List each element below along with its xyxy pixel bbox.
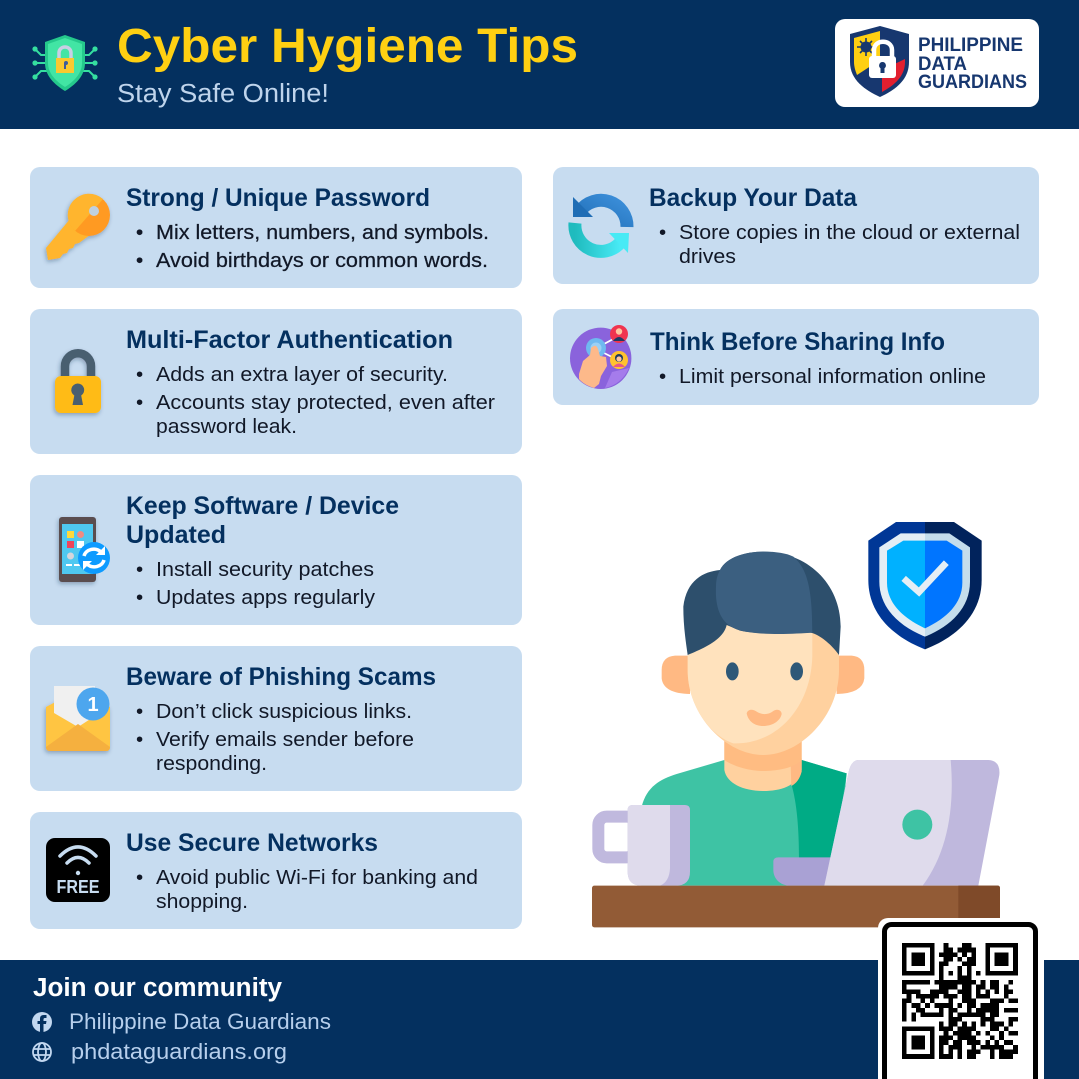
icon: phone with refresh (59, 517, 110, 582)
logo: Philippine Data Guardians: DATA (918, 54, 967, 75)
bullet list: Updates apps regularly (156, 586, 376, 609)
laptop (824, 760, 999, 886)
bullet list (136, 558, 376, 609)
website label: phdataguardians.org (71, 1039, 287, 1064)
panel: secure networks (30, 812, 522, 929)
heading: Beware of Phishing Scams (126, 663, 436, 691)
logo: Philippine Data Guardians: GUARDIANS (918, 72, 1027, 93)
icon: padlock (55, 353, 101, 413)
heading: Keep Software / Device (126, 492, 399, 520)
bullet list (136, 221, 489, 272)
bullet list: Avoid birthdays or common words. (156, 249, 488, 272)
bullet list: • (136, 249, 143, 272)
icon: envelope with badge: 1 (87, 694, 99, 716)
bullet list: • (136, 558, 143, 581)
heading: Backup Your Data (649, 184, 858, 212)
bullet list: Verify emails sender before (156, 728, 414, 751)
bullet list (659, 221, 1020, 268)
hair (683, 552, 841, 655)
icon: envelope with badge (46, 686, 110, 751)
heading: Updated (126, 521, 226, 549)
panel: strong password (30, 167, 522, 288)
icon: key (46, 194, 110, 260)
facebook label: Philippine Data Guardians (69, 1009, 331, 1034)
bullet list: Accounts stay protected, even after (156, 391, 495, 414)
neck (724, 740, 802, 791)
heading (126, 492, 399, 549)
bullet list: • (136, 728, 143, 751)
heading: Use Secure Networks (126, 829, 378, 857)
bullet list (136, 363, 495, 438)
icon: free wifi: FREE (56, 877, 100, 897)
bullet list: shopping. (156, 890, 248, 913)
bullet list: • (136, 586, 143, 609)
illustration: person at laptop with shield (592, 522, 1000, 927)
bullet list: password leak. (156, 415, 297, 438)
icon: facebook (32, 1012, 52, 1032)
heading: Strong / Unique Password (126, 184, 430, 212)
bullet list: • (136, 221, 143, 244)
bullet list (136, 866, 478, 913)
bullet list: • (136, 391, 143, 414)
mug (598, 805, 690, 886)
bullet list: Avoid public Wi-Fi for banking and (156, 866, 478, 889)
desk (592, 886, 1000, 927)
bullet list: Don’t click suspicious links. (156, 700, 412, 723)
icon: green security shield (32, 35, 98, 91)
panel: think before sharing (553, 309, 1039, 405)
panel: phishing scams (30, 646, 522, 791)
shirt (642, 760, 847, 886)
bullet list: Limit personal information online (679, 365, 986, 388)
bullet list: • (136, 866, 143, 889)
icon: sync arrows (573, 197, 629, 253)
subtitle: Stay Safe Online! (117, 80, 329, 108)
QR code (878, 918, 1044, 1079)
bullet list: Store copies in the cloud or external (679, 221, 1020, 244)
bullet list: Mix letters, numbers, and symbols. (156, 221, 489, 244)
bullet list: Install security patches (156, 558, 374, 581)
face (688, 610, 839, 755)
logo: Philippine Data Guardians (835, 19, 1039, 107)
panel: multi-factor authentication (30, 309, 522, 454)
icon: security shield (868, 522, 982, 649)
logo: Philippine Data Guardians: PHILIPPINE (918, 35, 1023, 56)
footer band (0, 960, 1079, 1079)
bullet list: responding. (156, 752, 267, 775)
footer heading: Join our community (33, 974, 283, 1002)
bullet list: • (659, 365, 666, 388)
bullet list (136, 700, 414, 775)
icon: globe (33, 1043, 51, 1061)
header band (0, 0, 1079, 129)
panel: backup data (553, 167, 1039, 284)
ears (662, 656, 864, 694)
heading: Multi-Factor Authentication (126, 326, 453, 354)
bullet list: • (659, 221, 666, 244)
icon: hand touching contacts (570, 325, 631, 389)
bullet list: • (136, 700, 143, 723)
panel: keep software updated (30, 475, 522, 625)
bullet list: Adds an extra layer of security. (156, 363, 448, 386)
trackpad (773, 857, 833, 886)
bullet list: drives (679, 245, 736, 268)
heading: Think Before Sharing Info (650, 328, 945, 356)
bullet list: • (136, 363, 143, 386)
title: Cyber Hygiene Tips (117, 20, 578, 73)
icon: free wifi (46, 838, 110, 902)
